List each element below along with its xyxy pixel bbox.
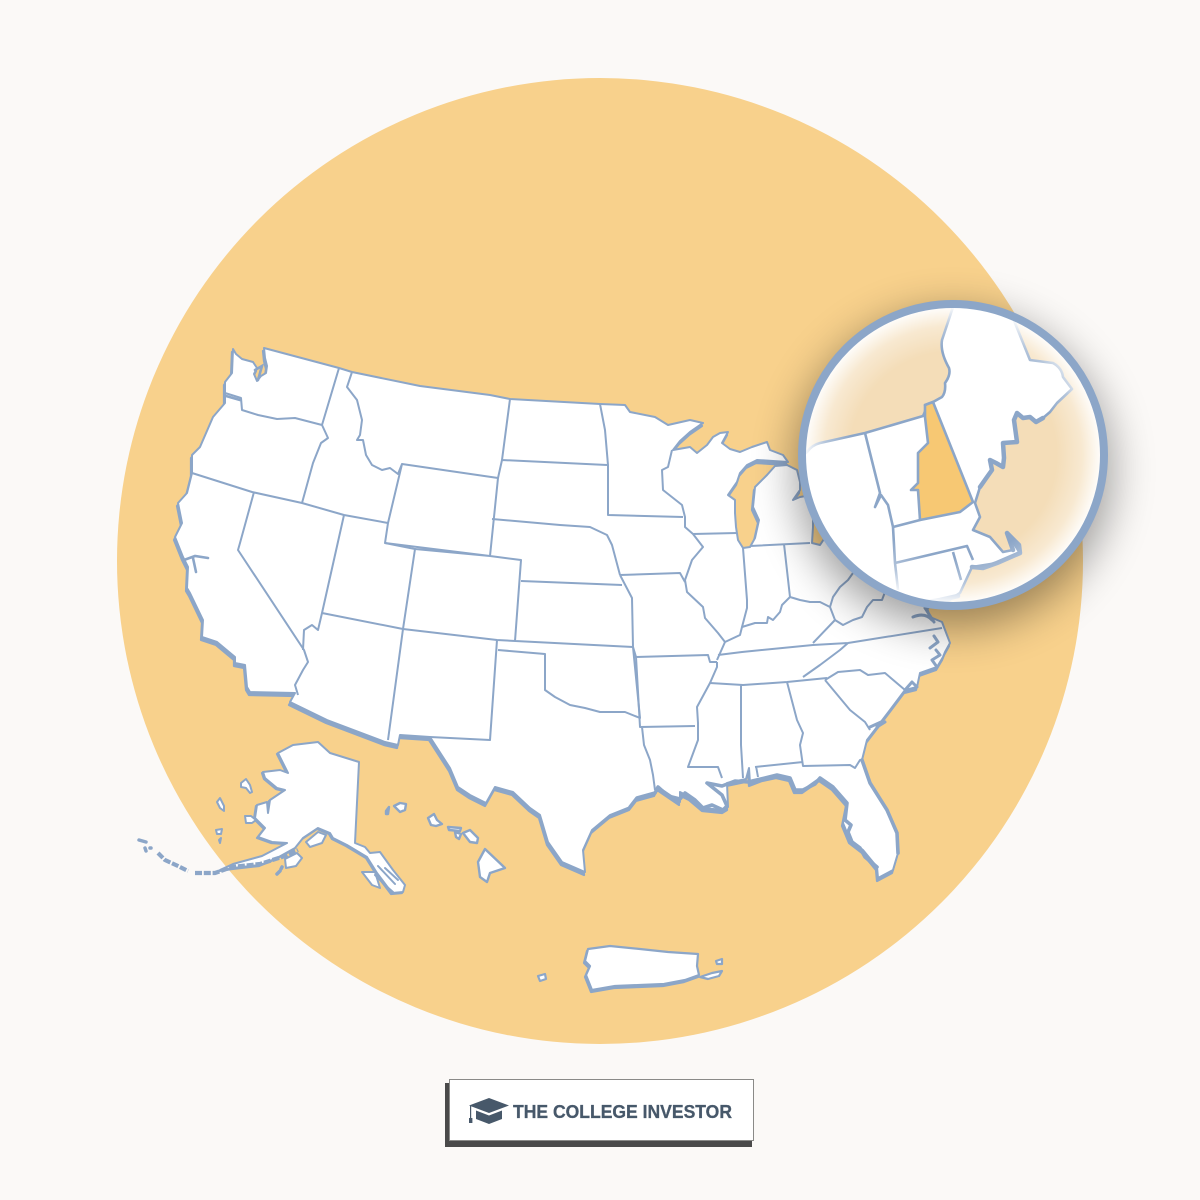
magnifier lens: New England inset <box>798 300 1108 610</box>
map: Alaska <box>139 742 405 894</box>
coastline detail: Gulf and Florida <box>630 760 898 867</box>
icon: graduation cap <box>469 1098 509 1124</box>
Puerto Rico outlying islands <box>538 959 722 981</box>
map: Puerto Rico <box>538 946 722 992</box>
map: contiguous United States <box>174 348 950 881</box>
New England coastline detail <box>929 410 1046 602</box>
magnifier shadow <box>795 312 1111 628</box>
coastline detail: Atlantic and Chesapeake <box>870 608 940 727</box>
logo: The College Investor <box>445 1080 754 1147</box>
New England land <box>806 308 1074 602</box>
New England state borders <box>865 433 973 590</box>
state: New Hampshire <box>911 402 973 520</box>
map: Hawaii <box>386 803 505 882</box>
Alaska islands and Aleutian chain <box>139 779 398 892</box>
background circle <box>117 78 1083 1044</box>
logo text: THE COLLEGE INVESTOR <box>513 1102 732 1122</box>
magnifier ring <box>802 304 1104 606</box>
infographic: US map highlighting New Hampshire <box>117 78 1138 1147</box>
coastline detail: Puget Sound and San Francisco Bay <box>184 366 262 572</box>
state borders <box>192 368 942 790</box>
